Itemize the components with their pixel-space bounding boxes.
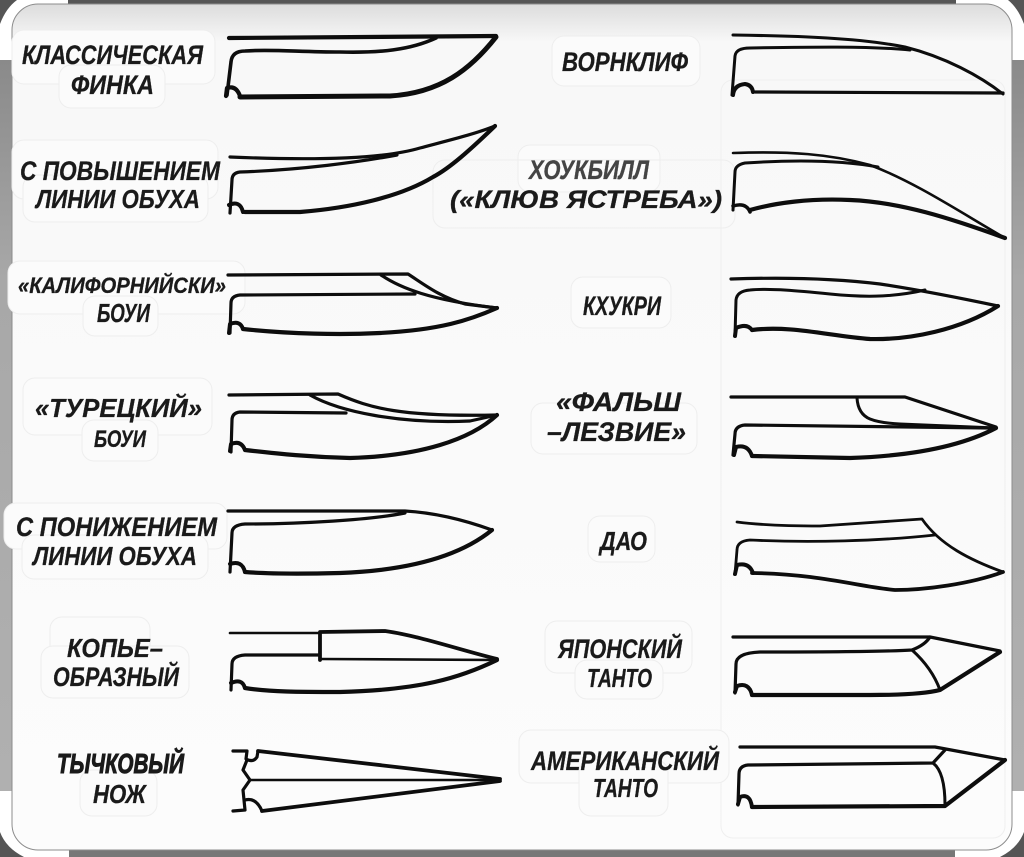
blade: калифорнийски боуи [228, 274, 497, 334]
label: калифорнийски боуи: БОУИ [97, 298, 151, 328]
label: с повышением линии обуха [12, 140, 220, 222]
label: турецкий боуи: «ТУРЕЦКИЙ» [35, 393, 202, 423]
label: с понижением линии обуха: ЛИНИИ ОБУХА [31, 541, 197, 571]
label: классическая финка: КЛАССИЧЕСКАЯ [22, 40, 204, 70]
label: американский танто: ТАНТО [593, 773, 658, 803]
label: дао [588, 516, 655, 562]
label: хоукбилл клюв ястреба: («КЛЮВ ЯСТРЕБА») [450, 186, 722, 214]
label: тычковый нож: НОЖ [93, 779, 148, 809]
label: американский танто [519, 730, 729, 816]
label: хоукбилл клюв ястреба [433, 145, 735, 228]
blade: с понижением линии обуха [228, 511, 492, 574]
label: турецкий боуи [23, 378, 212, 461]
label: кхукри: КХУКРИ [583, 291, 661, 321]
label: американский танто: АМЕРИКАНСКИЙ [530, 744, 719, 776]
blade: дао [735, 519, 1003, 590]
blade: турецкий боуи [229, 394, 497, 458]
label: тычковый нож [57, 747, 185, 816]
label: японский танто [545, 621, 692, 699]
label: копьеобразный [41, 617, 189, 698]
blade: кхукри [731, 278, 998, 339]
label: копьеобразный: ОБРАЗНЫЙ [53, 660, 179, 692]
blade: тычковый нож [233, 751, 500, 811]
label: японский танто: ЯПОНСКИЙ [557, 632, 682, 664]
label: калифорнийски боуи [8, 261, 245, 336]
label: фальш-лезвие: –ЛЕЗВИЕ» [547, 417, 686, 447]
label: кхукри [571, 277, 671, 328]
blade: японский танто [733, 637, 1000, 695]
blade: копьеобразный [230, 631, 497, 692]
label: фальш-лезвие: «ФАЛЬШ [556, 387, 682, 417]
label: фальш-лезвие [531, 387, 697, 454]
blade: с повышением линии обуха [229, 126, 495, 213]
right column outline box [721, 80, 1005, 838]
label: дао: ДАО [598, 526, 647, 556]
label: с понижением линии обуха: С ПОНИЖЕНИЕМ [16, 512, 217, 542]
label: с повышением линии обуха: С ПОВЫШЕНИЕМ [20, 156, 220, 186]
label: с повышением линии обуха: ЛИНИИ ОБУХА [34, 184, 200, 214]
label: классическая финка [12, 30, 215, 108]
label: японский танто: ТАНТО [587, 663, 652, 693]
label: калифорнийски боуи: «КАЛИФОРНИЙСКИ» [18, 272, 226, 298]
label: хоукбилл клюв ястреба: ХОУКБИЛЛ [527, 155, 650, 185]
blade: американский танто [738, 747, 1005, 807]
blade: ворнклиф [732, 35, 1003, 95]
label: турецкий боуи: БОУИ [94, 426, 147, 453]
label: ворнклиф [552, 36, 700, 86]
label: с понижением линии обуха [4, 503, 227, 579]
label: копьеобразный: КОПЬЕ– [67, 633, 163, 663]
blade: классическая финка [226, 36, 496, 97]
blade: фальш-лезвие [731, 397, 996, 458]
blade: хоукбилл [733, 152, 1005, 238]
label: тычковый нож: ТЫЧКОВЫЙ [57, 747, 185, 779]
label: ворнклиф: ВОРНКЛИФ [562, 47, 688, 77]
label: классическая финка: ФИНКА [71, 70, 154, 100]
